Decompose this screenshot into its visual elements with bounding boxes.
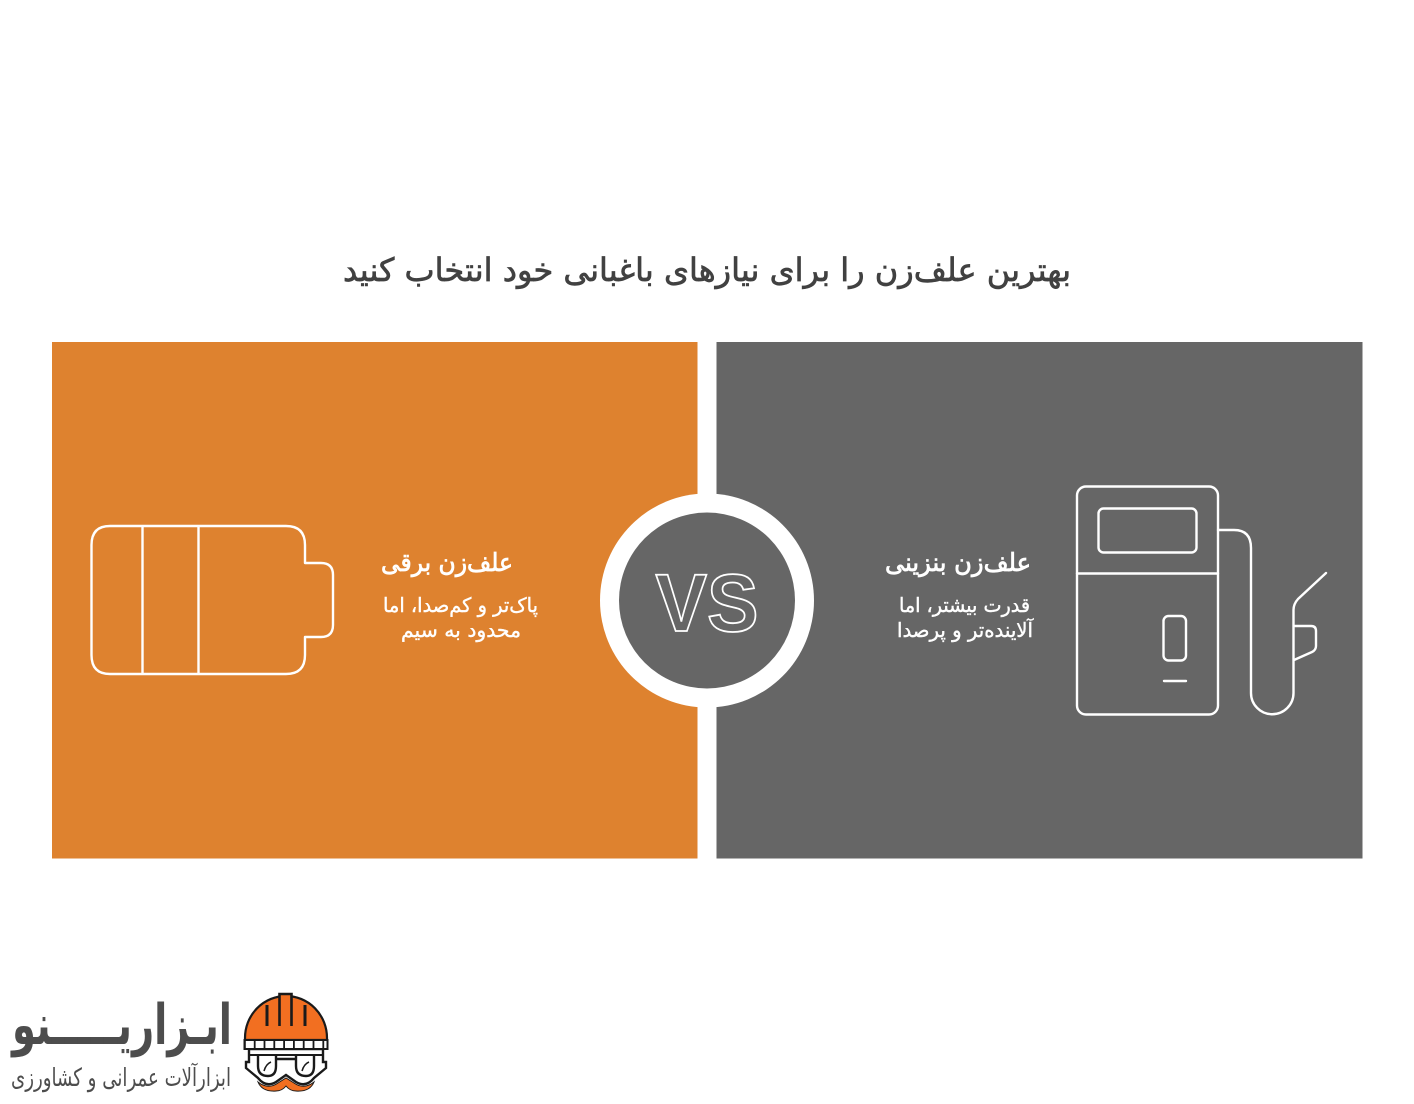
description: electric mower	[383, 593, 538, 642]
icon: helmet mascot	[244, 994, 328, 1091]
panel: gasoline mower	[716, 342, 1362, 858]
heading: gasoline mower: علف‌زن بنزینی	[885, 548, 1031, 577]
logo tagline: ابزارآلات عمرانی و کشاورزی	[11, 1062, 231, 1093]
panel background: electric	[52, 342, 698, 858]
panel: electric mower	[52, 342, 698, 858]
icon: battery	[92, 526, 333, 674]
panel background: gasoline	[716, 342, 1362, 858]
VS badge	[600, 494, 814, 708]
title: بهترین علف‌زن را برای نیازهای باغبانی خود انتخاب کنید	[343, 251, 1071, 289]
logo wordmark: ابـزاریـــــنو	[10, 993, 232, 1058]
description: electric mower: پاک‌تر و کم‌صدا، اما	[383, 593, 538, 618]
icon: fuel pump	[1077, 486, 1326, 714]
heading: electric mower: علف‌زن برقی	[381, 548, 513, 577]
description: gasoline mower: آلاینده‌تر و پرصدا	[897, 617, 1034, 643]
description: electric mower: محدود به سیم	[401, 618, 521, 642]
logo	[10, 993, 328, 1093]
description: gasoline mower: قدرت بیشتر، اما	[899, 593, 1030, 617]
description: gasoline mower	[897, 593, 1034, 643]
VS badge: VS	[656, 558, 758, 649]
